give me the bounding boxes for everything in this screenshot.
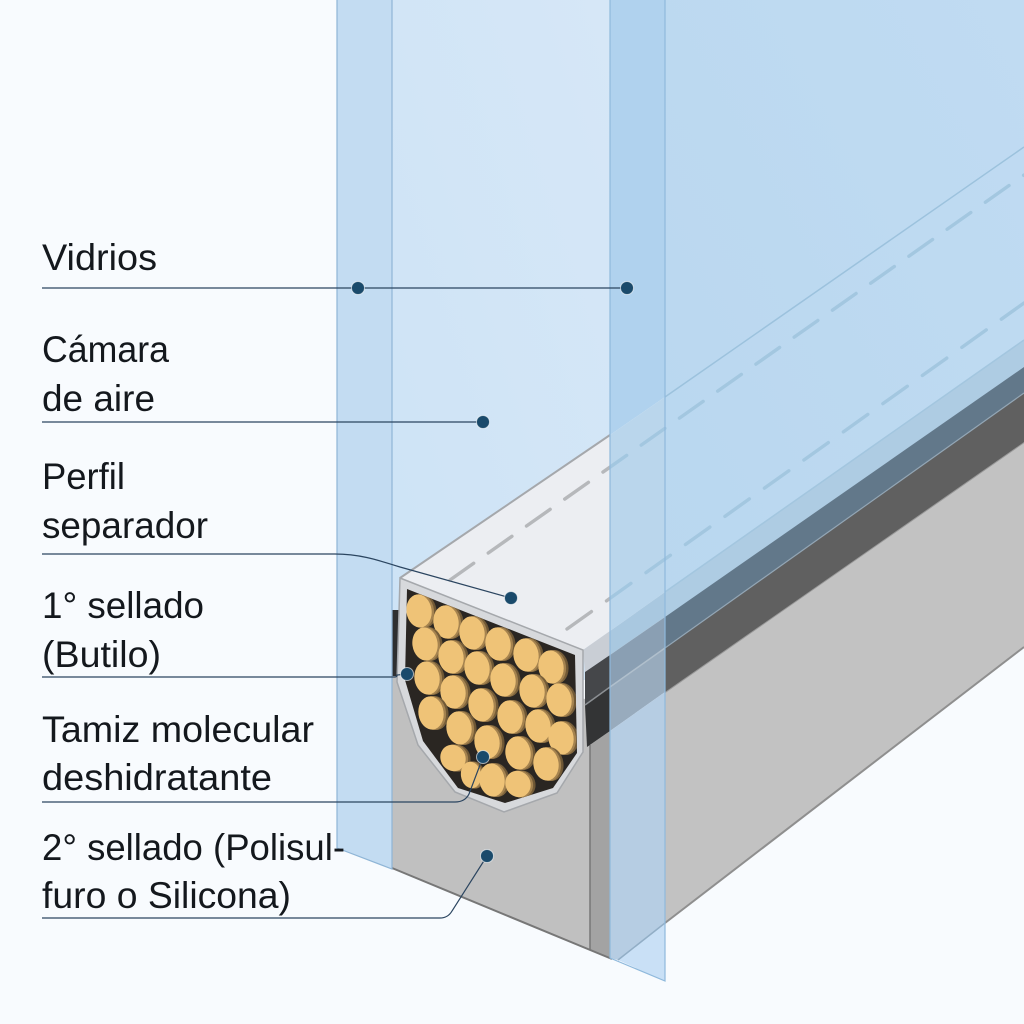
secondary seal body [392,442,1024,959]
butyl seal left [392,610,401,676]
label: Perfil separador [42,456,208,546]
label: Cámara de aire: de aire [42,378,155,419]
label: 1° sellado (Butilo): (Butilo) [42,634,161,675]
spacer end profile [397,578,583,812]
spacer top face [400,434,610,650]
label: 2° sellado (Polisulfuro o Silicona): 2° sellado (Polisul- [42,827,345,868]
cylinder row 5 [438,743,538,799]
right glass pane [609,0,666,982]
cylinder row 3 [412,659,581,757]
marker dots [352,282,634,862]
label: Tamiz molecular deshidratante [42,709,314,798]
left glass pane [337,0,392,869]
label: Tamiz molecular deshidratante: Tamiz molecular [42,709,314,750]
cylinder row 2 [410,625,579,719]
back glass surface [665,0,1024,648]
continuing spacer and bands seen through the back glass [666,146,1024,692]
label: Cámara de aire: Cámara [42,329,169,370]
label: Vidrios: Vidrios [42,237,157,278]
leader lines [42,288,627,918]
label: Perfil separador: Perfil [42,456,125,497]
label: 1° sellado (Butilo) [42,585,204,675]
label: Perfil separador: separador [42,505,208,546]
molecular sieve [404,589,581,803]
label: 1° sellado (Butilo): 1° sellado [42,585,204,626]
label: Cámara de aire [42,329,169,419]
cylinder row 4 [416,694,566,783]
label: Tamiz molecular deshidratante: deshidratante [42,757,272,798]
air chamber [392,0,610,680]
label: 2° sellado (Polisulfuro o Silicona): furo o Silicona) [42,875,291,916]
spacer side and butyl band near corner [583,631,610,747]
label: 2° sellado (Polisulfuro o Silicona) [42,827,345,916]
cylinder row 1 [404,592,571,686]
